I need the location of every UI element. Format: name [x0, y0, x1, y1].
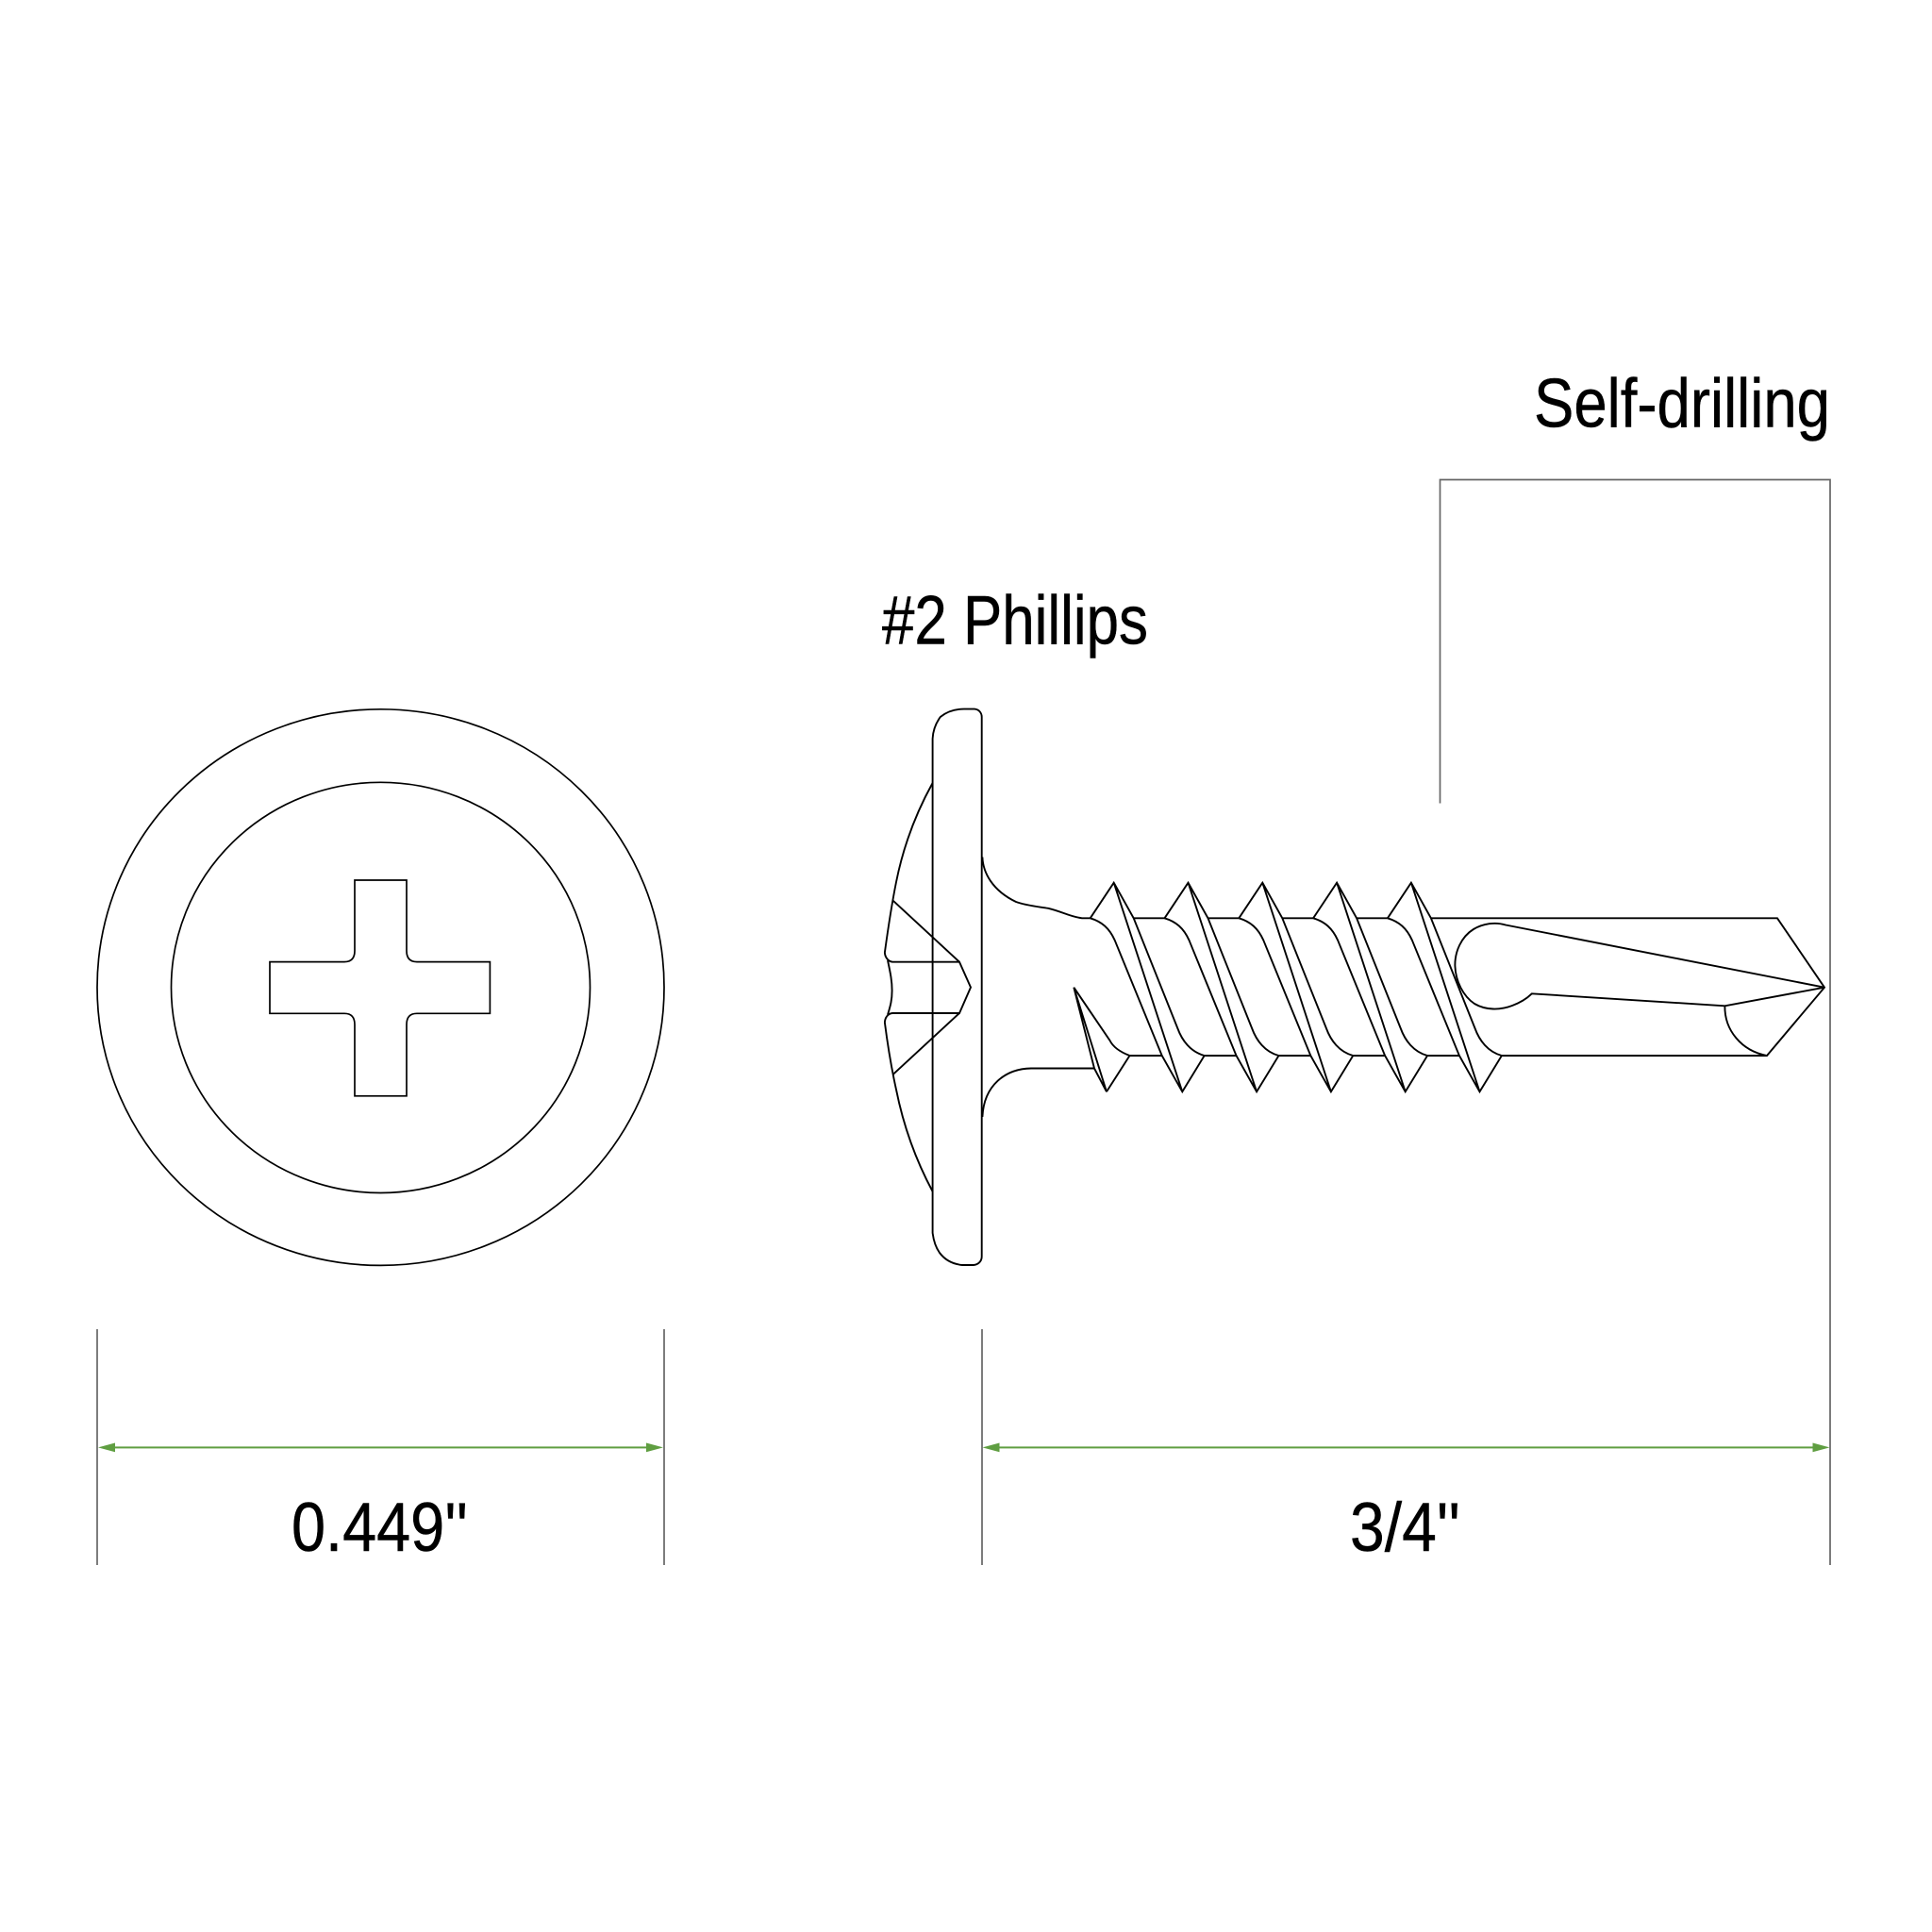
drill tip outline [1431, 918, 1824, 1056]
thread turn 4 [1313, 883, 1427, 1091]
recess diagonals [893, 901, 959, 1074]
drill relief arc [1724, 1006, 1767, 1056]
label: phillips drive: #2 Phillips [882, 583, 1148, 659]
thread turn 1 [1091, 883, 1205, 1091]
arrow: length dimension [983, 1443, 1830, 1452]
self-drilling bracket [1440, 479, 1830, 1565]
icon: phillips cross recess [270, 880, 490, 1096]
recess notch edge [888, 960, 892, 1015]
inner head dome [172, 782, 591, 1192]
screw side view [885, 709, 1824, 1265]
thread turn 5 [1388, 883, 1502, 1091]
thread turn 2 [1164, 883, 1279, 1091]
shank fillets [982, 857, 1094, 1117]
partial first thread [1074, 988, 1130, 1091]
arrow: diameter dimension [98, 1443, 663, 1452]
head flange [933, 709, 982, 1265]
drill flute [1455, 924, 1824, 1009]
extension line: diameter right [663, 1329, 665, 1565]
outer head rim [97, 709, 664, 1265]
label: screw length: 3/4'' [1350, 1490, 1460, 1566]
head dome with recess [885, 783, 971, 1191]
label: self-drilling: Self-drilling [1534, 366, 1830, 442]
extension line: diameter left [96, 1329, 98, 1565]
screw head top view [97, 709, 664, 1265]
extension line: length left [981, 1329, 983, 1565]
thread turn 3 [1239, 883, 1353, 1091]
label: head diameter: 0.449'' [291, 1490, 468, 1566]
